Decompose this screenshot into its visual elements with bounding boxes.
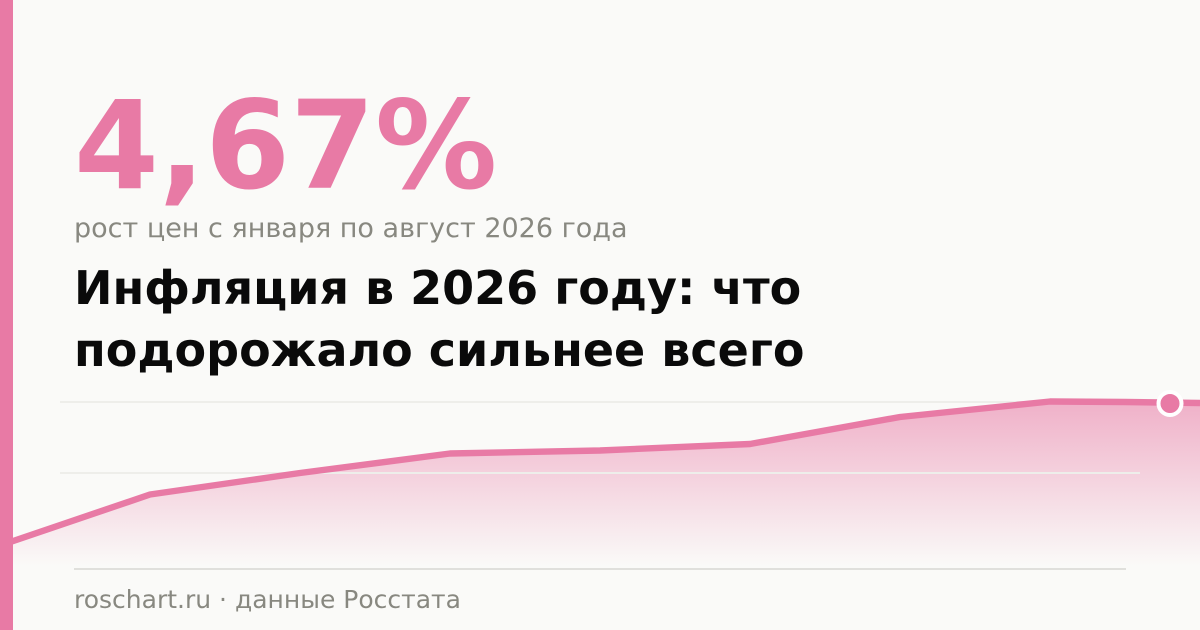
title: Инфляция в 2026 году: что xyxy=(74,261,801,315)
subtitle: рост цен с января по август 2026 года xyxy=(74,213,628,244)
big number: 4,67% xyxy=(74,75,497,217)
last data point marker xyxy=(1158,392,1182,415)
footer source: roschart.ru · данные Росстата xyxy=(74,585,461,614)
chart area fill xyxy=(0,402,1200,566)
title: подорожало сильнее всего xyxy=(74,323,804,377)
chart line xyxy=(0,402,1200,546)
left accent bar xyxy=(0,0,13,630)
area chart: inflation growth xyxy=(0,392,1200,566)
title xyxy=(74,261,804,377)
